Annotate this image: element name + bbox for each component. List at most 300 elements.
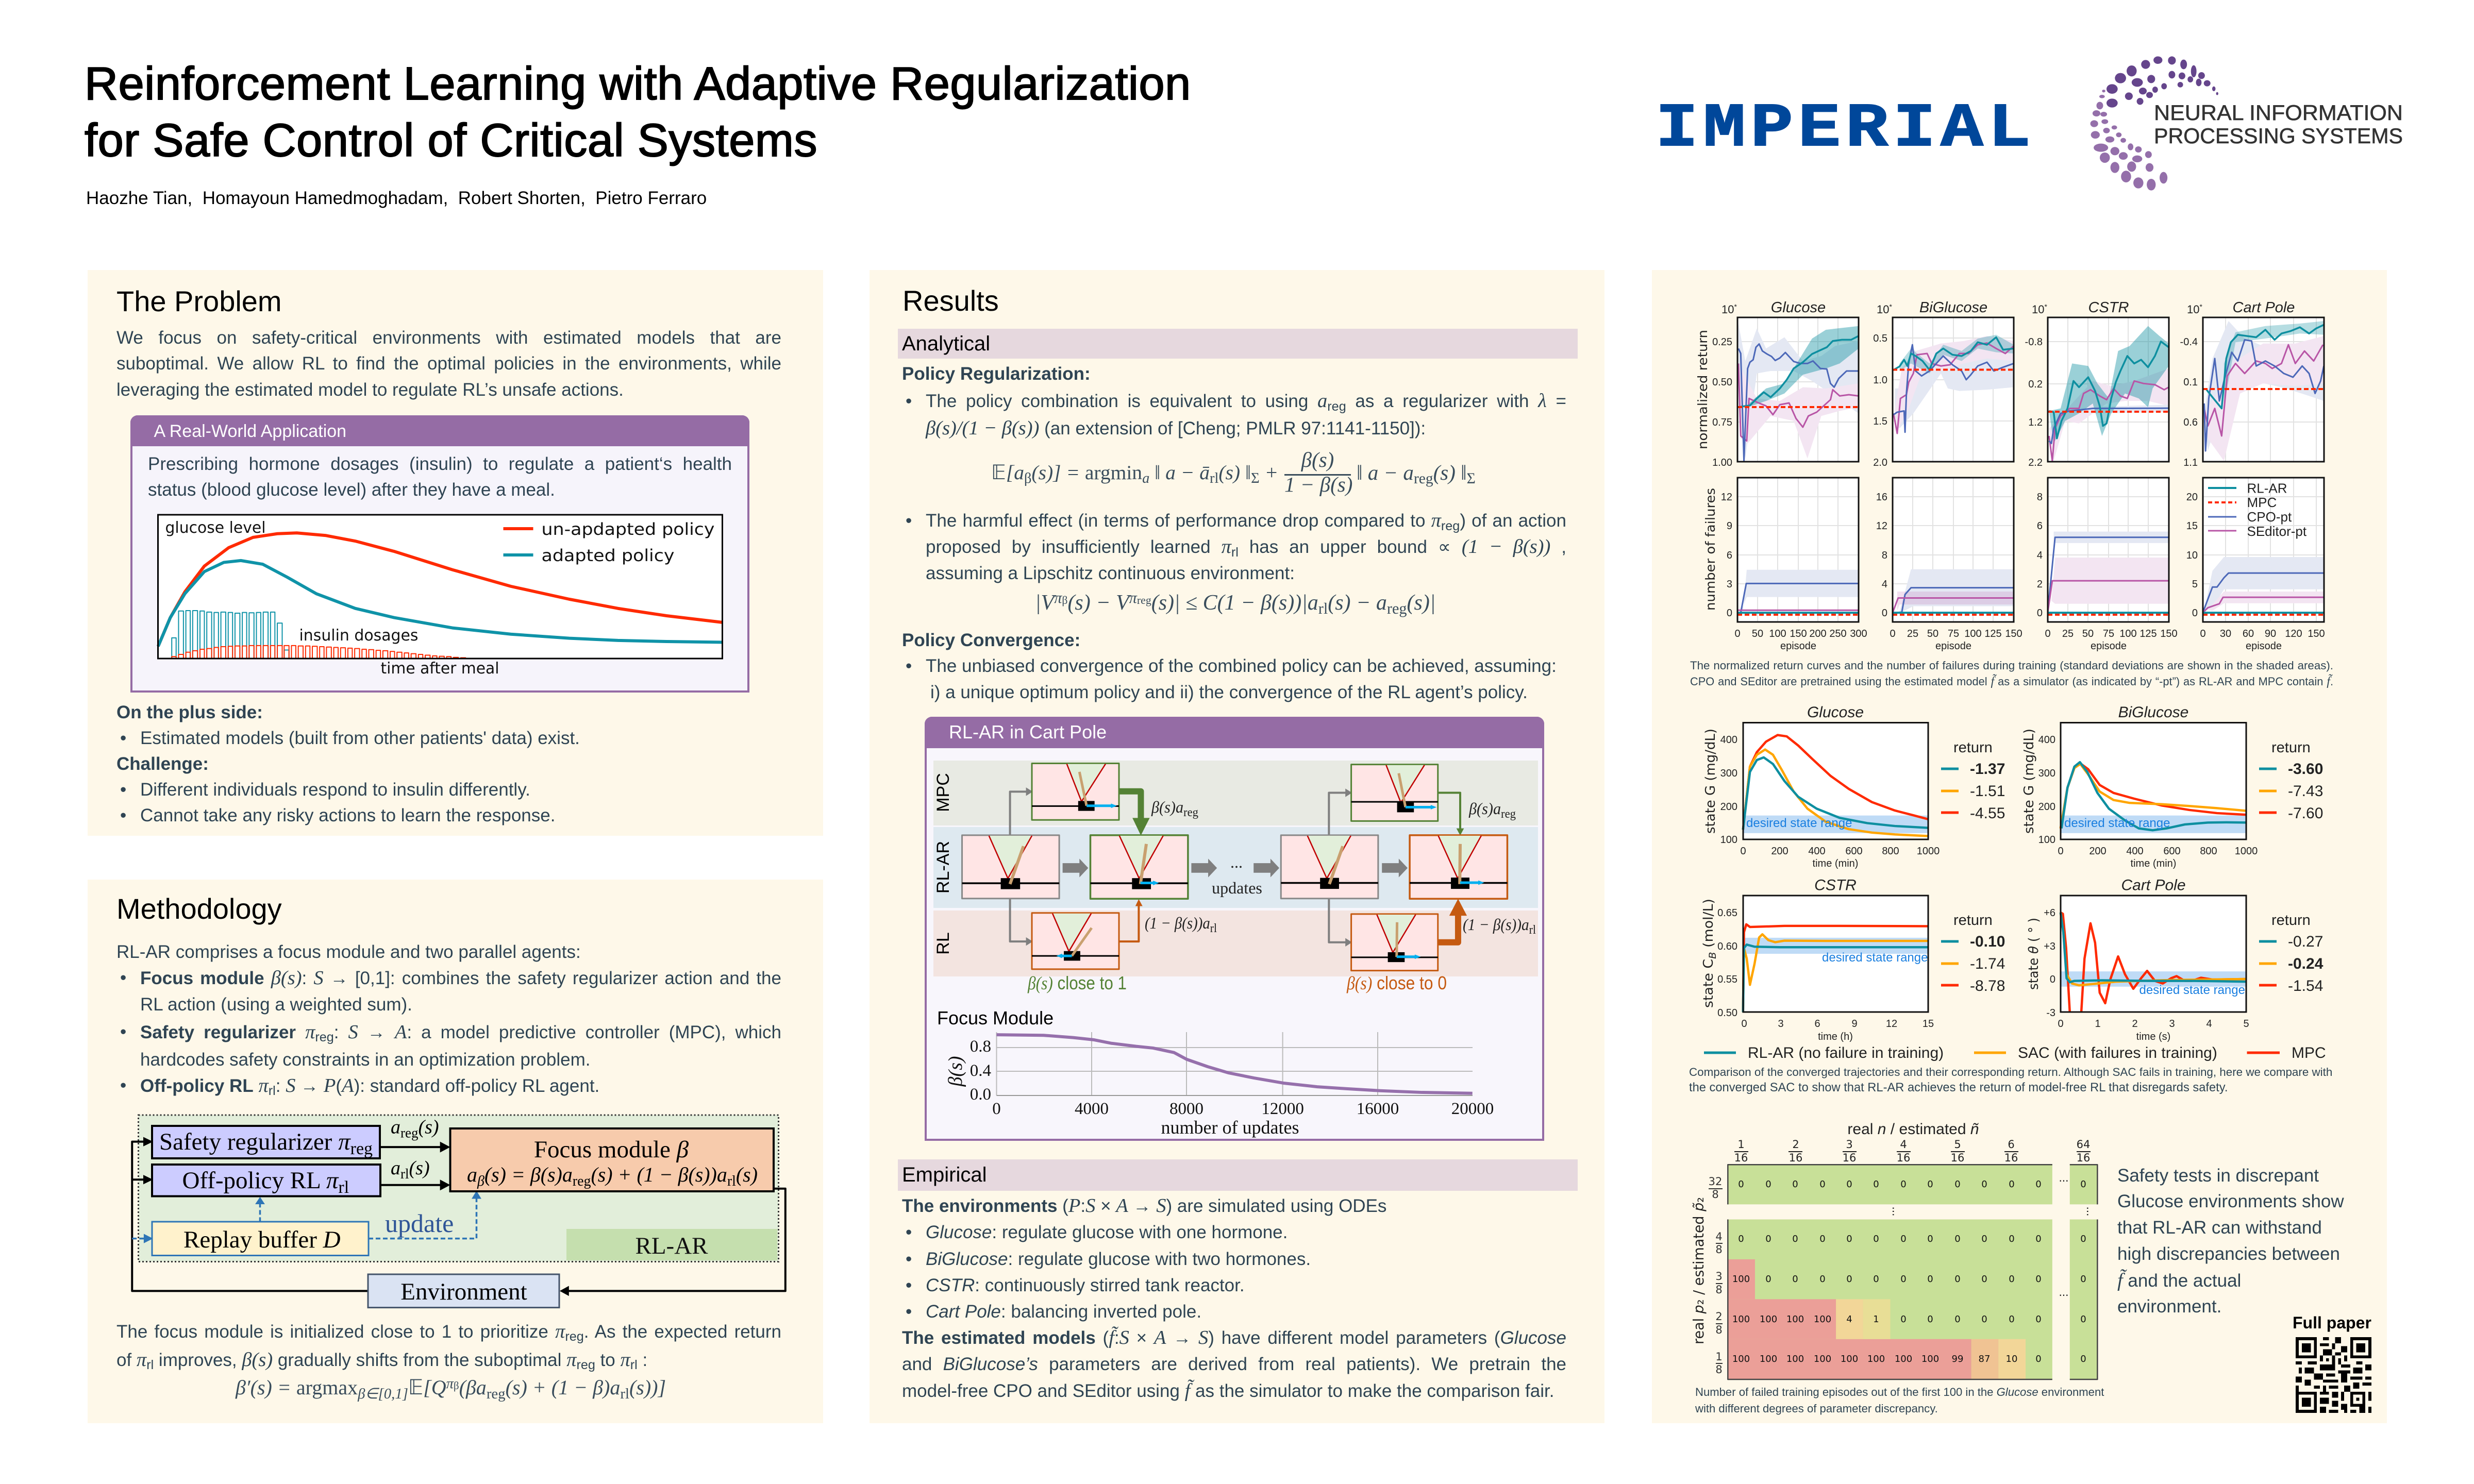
chart: Focus Module: 0 bbox=[992, 1100, 1001, 1118]
callout header bbox=[130, 415, 749, 446]
plot: BiGlucose return: * bbox=[1890, 302, 1893, 311]
chart grid: training curves bbox=[1695, 299, 2325, 652]
text block: safety tests summary bbox=[2117, 1162, 2360, 1320]
plot: CSTR return: 2.2 bbox=[2028, 457, 2043, 468]
plot: Cart Pole trajectory: +3 bbox=[2044, 941, 2055, 952]
focus module box: (s) + (1 − β(s))a bbox=[591, 1163, 727, 1186]
cart frame: MPC late bbox=[1351, 765, 1438, 821]
cart frame: RL-AR combined, early bbox=[1090, 835, 1188, 899]
plot: BiGlucose return: 1.5 bbox=[1873, 416, 1887, 427]
caption: training curves: CPO and SEditor are pretrained using the estimated model f̃ as a simulator (as indicated by “-pt”) as RL-AR and MPC contain f̃. bbox=[1690, 675, 2333, 688]
row headers: 8 bbox=[1715, 1284, 1723, 1296]
text block: policy convergence: Policy Convergence: bbox=[902, 630, 1080, 650]
plot: Cart Pole return: 1.1 bbox=[2183, 457, 2198, 468]
plot: BiGlucose trajectory: BiGlucose bbox=[2118, 704, 2188, 721]
legend: Cart Pole return: return bbox=[2271, 912, 2311, 929]
chart: Focus Module: 4000 bbox=[1075, 1100, 1109, 1118]
text block: focus module explanation: of πrl improves, β(s) gradually shifts from the suboptimal πreg to πrl : bbox=[116, 1349, 647, 1372]
focus module box bbox=[450, 1128, 774, 1191]
callout text: Prescribing hormone dosages (insulin) to regulate a patient‘s health bbox=[148, 454, 732, 474]
column headers: 1 bbox=[1737, 1138, 1745, 1151]
cell values: 0 bbox=[1981, 1314, 1987, 1325]
axis titles: normalized return bbox=[1695, 330, 1710, 449]
plot: Glucose failures: 3 bbox=[1727, 579, 1732, 590]
cell values: 100 bbox=[1814, 1314, 1831, 1325]
safety regularizer box: Safety regularizer π bbox=[159, 1128, 350, 1155]
callout header: RL-AR in Cart Pole bbox=[949, 721, 1107, 743]
arrow labels: β(s)a bbox=[1469, 799, 1503, 818]
cell values: 0 bbox=[1819, 1234, 1826, 1244]
plot: CSTR return: 1.2 bbox=[2028, 417, 2043, 428]
plot: Glucose trajectory: 200 bbox=[1771, 846, 1788, 857]
beta captions: β(s) close to 0 bbox=[1346, 972, 1447, 993]
arrow labels: (1 − β(s))a bbox=[1463, 915, 1535, 934]
text block: policy regularization: β(s)/(1 − β(s)) (an extension of [Cheng; PMLR 97:1141-1150]): bbox=[926, 417, 1426, 439]
caption: trajectories: the converged SAC to show that RL-AR achieves the return of model-free RL that disregards safety. bbox=[1689, 1081, 2228, 1094]
logo: NeurIPS: NEURAL INFORMATION bbox=[2154, 100, 2403, 125]
title: Reinforcement Learning with Adaptive Regularization bbox=[85, 58, 1191, 110]
text block: safety tests summary: high discrepancies between bbox=[2117, 1244, 2340, 1264]
plot: CSTR failures: 150 bbox=[2160, 628, 2178, 639]
cell values: 0 bbox=[1927, 1234, 1933, 1244]
cart frame: MPC early bbox=[1032, 763, 1119, 820]
cell values: 0 bbox=[1792, 1234, 1798, 1244]
text block: harmful effect: proposed by insufficiently learned πrl has an upper bound ∝ (1 − β(s)) , bbox=[926, 536, 1566, 560]
text block: RL-AR components: RL action (using a weighted sum). bbox=[140, 994, 412, 1015]
plot: Glucose trajectory: 0 bbox=[1740, 846, 1746, 857]
environment box bbox=[368, 1274, 559, 1308]
plot: CSTR trajectory bbox=[1701, 877, 2005, 1042]
legend: BiGlucose return bbox=[2259, 739, 2323, 822]
chart: Focus Module bbox=[937, 1007, 1494, 1138]
plot: BiGlucose trajectory: 300 bbox=[2038, 768, 2055, 779]
plot: Glucose return bbox=[1712, 299, 1859, 468]
text block: RL-AR components bbox=[116, 942, 781, 1098]
cell values: 0 bbox=[1900, 1314, 1907, 1325]
plot: Cart Pole trajectory: 0 bbox=[2050, 974, 2055, 985]
icon: QR code bbox=[2295, 1337, 2372, 1413]
authors: Haozhe Tian, Homayoun Hamedmoghadam, Robert Shorten, Pietro Ferraro bbox=[86, 188, 707, 208]
text block: plus side and challenge: Cannot take any risky actions to learn the response. bbox=[140, 805, 555, 825]
cell values: 0 bbox=[2009, 1234, 2015, 1244]
plot: Cart Pole return: 0.1 bbox=[2183, 377, 2198, 388]
plot: BiGlucose trajectory: 400 bbox=[2038, 734, 2055, 746]
cell values: 0 bbox=[1900, 1179, 1907, 1190]
beta captions bbox=[1027, 972, 1447, 993]
cart frame: RL-AR combined, late bbox=[1410, 835, 1507, 899]
plot: BiGlucose return: 0.5 bbox=[1873, 333, 1887, 344]
plot: Cart Pole return bbox=[2180, 299, 2324, 468]
plot: CSTR trajectory: B bbox=[1707, 952, 1718, 959]
cell values: 0 bbox=[2080, 1314, 2086, 1325]
plot: Cart Pole return: * bbox=[2200, 302, 2203, 311]
plot: Cart Pole failures with legend: 15 bbox=[2186, 520, 2198, 532]
cell values: 0 bbox=[1846, 1274, 1852, 1285]
diagram: cart pole comparison bbox=[933, 761, 1538, 993]
plot: BiGlucose trajectory: 0 bbox=[2058, 846, 2064, 857]
plot: CSTR failures: 100 bbox=[2119, 628, 2137, 639]
legend: Glucose return: -1.51 bbox=[1970, 783, 2005, 800]
cell values: 0 bbox=[2009, 1274, 2015, 1285]
plot: Cart Pole return: 10 bbox=[2187, 303, 2200, 316]
panel: The Problem bbox=[88, 270, 823, 836]
text block: plus side and challenge: Different individuals respond to insulin differently. bbox=[140, 780, 530, 800]
text block: environments and models: model-free CPO and SEditor using f̃ as the simulator to make the comparison fair. bbox=[902, 1380, 1554, 1402]
column headers: 4 bbox=[1900, 1138, 1907, 1151]
text block: environments and models: The estimated models (f̃:S × A → S) have different model parameters (Glucose bbox=[902, 1327, 1566, 1348]
equation: focus update: β′(s) = argmaxβ∈[0,1]𝔼[Qπβ(βareg(s) + (1 − β)arl(s))] bbox=[236, 1375, 666, 1402]
text block: problem intro bbox=[116, 328, 781, 400]
chart: Focus Module: 12000 bbox=[1261, 1100, 1304, 1118]
row headers bbox=[1709, 1175, 1723, 1376]
plot: Glucose return: 0.50 bbox=[1712, 377, 1732, 388]
cell values: 100 bbox=[1921, 1354, 1939, 1364]
chart: glucose level vs time after meal: adapted policy bbox=[541, 546, 674, 565]
cell values: ... bbox=[1890, 1206, 1902, 1217]
plot: CSTR trajectory: 15 bbox=[1923, 1018, 1934, 1030]
equation: regularized objective: β(s) bbox=[1301, 448, 1334, 471]
chart: safety test heatmap: real p₂ / estimated p̃₂ bbox=[1690, 1197, 1707, 1344]
plot: Glucose trajectory: desired state range bbox=[1746, 816, 1852, 830]
cart frame: RL-AR later bbox=[1281, 835, 1378, 899]
cell values: 0 bbox=[2035, 1354, 2042, 1364]
legend: training curves: MPC bbox=[2247, 495, 2277, 510]
legend: CSTR return: -1.74 bbox=[1970, 955, 2005, 972]
plot: Glucose trajectory bbox=[1703, 704, 2005, 869]
plot: Glucose trajectory: 300 bbox=[1720, 768, 1737, 779]
callout text: status (blood glucose level) after they have a meal. bbox=[148, 480, 555, 500]
panel: Results bbox=[870, 270, 1604, 1423]
plot: CSTR failures: 0 bbox=[2037, 608, 2043, 619]
plot: BiGlucose trajectory: state G (mg/dL) bbox=[2021, 729, 2037, 834]
legend: CSTR return: return bbox=[1953, 912, 1993, 929]
cart frame: RL early bbox=[1032, 913, 1119, 969]
legend: Glucose return bbox=[1941, 739, 2005, 822]
plot: Glucose trajectory: Glucose bbox=[1807, 704, 1864, 721]
plot: BiGlucose failures: 16 bbox=[1876, 492, 1887, 503]
chart: glucose level vs time after meal: glucose level bbox=[165, 519, 265, 537]
panel: Experiments bbox=[1652, 270, 2387, 1423]
safety regularizer box: reg bbox=[350, 1139, 373, 1158]
cell values: 100 bbox=[1895, 1354, 1912, 1364]
cell values bbox=[1732, 1172, 2097, 1364]
arrow labels bbox=[1145, 798, 1536, 937]
plot: BiGlucose trajectory: 200 bbox=[2089, 846, 2107, 857]
plot: Glucose failures bbox=[1721, 478, 1867, 652]
plot: Cart Pole failures with legend: 90 bbox=[2265, 628, 2276, 639]
plot: Cart Pole return: Cart Pole bbox=[2233, 299, 2295, 316]
focus module box: reg bbox=[573, 1173, 591, 1189]
plot: CSTR failures bbox=[2037, 478, 2178, 652]
cell values: 0 bbox=[1927, 1274, 1933, 1285]
plot: Glucose trajectory: 600 bbox=[1845, 846, 1863, 857]
plot: CSTR failures: 25 bbox=[2062, 628, 2074, 639]
cell values: 0 bbox=[1765, 1234, 1771, 1244]
text block: policy convergence: The unbiased convergence of the combined policy can be achieved, assuming: bbox=[926, 656, 1557, 676]
column headers: 16 bbox=[2004, 1152, 2018, 1164]
plot: Glucose failures: 6 bbox=[1727, 550, 1732, 561]
text block: RL-AR components: Focus module β(s): S → [0,1]: combines the safety regularizer action and the bbox=[140, 967, 781, 989]
text block: environments and models: and BiGlucose’s parameters are derived from real patients). We pretrain the bbox=[902, 1354, 1566, 1374]
cell values: ... bbox=[2059, 1172, 2069, 1184]
cell values: 0 bbox=[1873, 1234, 1879, 1244]
legend: trajectories: RL-AR (no failure in training) bbox=[1748, 1044, 1944, 1061]
plot: Cart Pole trajectory: state θ ( ° ) bbox=[2026, 918, 2042, 990]
plot: Cart Pole return: -0.4 bbox=[2180, 336, 2198, 348]
plot: BiGlucose trajectory: 400 bbox=[2126, 846, 2144, 857]
caption: heatmap: with different degrees of parameter discrepancy. bbox=[1695, 1402, 1938, 1415]
text block: safety tests summary: Glucose environments show bbox=[2117, 1191, 2344, 1211]
plot: Cart Pole trajectory: +6 bbox=[2044, 907, 2055, 919]
plot: Glucose trajectory: state G (mg/dL) bbox=[1703, 729, 1718, 834]
chart: Focus Module: β(s) bbox=[945, 1056, 966, 1087]
plot: Cart Pole trajectory: 3 bbox=[2169, 1018, 2175, 1030]
plot: Glucose trajectory: 1000 bbox=[1917, 846, 1940, 857]
caption: trajectories bbox=[1689, 1064, 2332, 1095]
cell values: 0 bbox=[1954, 1274, 1961, 1285]
cell values: 0 bbox=[1846, 1234, 1852, 1244]
plot: BiGlucose failures: 25 bbox=[1907, 628, 1918, 639]
environment box: Environment bbox=[400, 1278, 527, 1305]
legend: Glucose return: -1.37 bbox=[1970, 761, 2005, 778]
section bar: Analytical: Analytical bbox=[902, 332, 990, 355]
plot: Cart Pole failures with legend: 0 bbox=[2200, 628, 2206, 639]
column headers: 16 bbox=[1734, 1152, 1748, 1164]
plot: Glucose failures: 12 bbox=[1721, 492, 1732, 503]
cell values: 0 bbox=[2009, 1314, 2015, 1325]
text block: environments and models: Cart Pole: balancing inverted pole. bbox=[926, 1302, 1201, 1322]
plot: Glucose trajectory: 200 bbox=[1720, 801, 1737, 813]
plot: CSTR return: CSTR bbox=[2088, 299, 2129, 316]
plot: Glucose trajectory: 400 bbox=[1808, 846, 1826, 857]
plot: BiGlucose return: 10 bbox=[1877, 303, 1890, 316]
chart: Focus Module: 8000 bbox=[1169, 1100, 1203, 1118]
caption: heatmap: Number of failed training episodes out of the first 100 in the Glucose environment bbox=[1695, 1385, 2104, 1398]
column headers: 16 bbox=[1897, 1152, 1910, 1164]
legend: training curves: CPO-pt bbox=[2247, 509, 2292, 525]
cell values: 0 bbox=[1981, 1179, 1987, 1190]
logo: NeurIPS bbox=[2091, 56, 2403, 191]
chart: Focus Module: 0.0 bbox=[970, 1085, 991, 1104]
text block: problem intro: leveraging the estimated model to regulate RL’s unsafe actions. bbox=[116, 380, 624, 400]
plot: CSTR trajectory: 0.65 bbox=[1717, 907, 1737, 919]
section bar: Empirical bbox=[898, 1159, 1578, 1191]
action labels: rl bbox=[400, 1166, 409, 1182]
plot: Cart Pole trajectory: Cart Pole bbox=[2121, 877, 2186, 893]
replay buffer box bbox=[152, 1222, 369, 1255]
cell values: 0 bbox=[1900, 1274, 1907, 1285]
text block: plus side and challenge: On the plus side: bbox=[116, 702, 263, 722]
row headers: 8 bbox=[1715, 1363, 1723, 1376]
row headers: 2 bbox=[1715, 1310, 1723, 1323]
axis titles: number of failures bbox=[1703, 488, 1718, 611]
column headers: 16 bbox=[1951, 1152, 1964, 1164]
cell values: 0 bbox=[1954, 1234, 1961, 1244]
cell values: 0 bbox=[1819, 1179, 1826, 1190]
focus module box: Focus module β bbox=[534, 1136, 689, 1163]
cell values: 0 bbox=[1900, 1234, 1907, 1244]
cell values: 4 bbox=[1846, 1314, 1852, 1325]
text block: policy regularization: The policy combination is equivalent to using areg as a regularizer with λ = bbox=[926, 390, 1566, 414]
text block: environments and models: Glucose: regulate glucose with one hormone. bbox=[926, 1222, 1288, 1242]
plot: Cart Pole trajectory: 2 bbox=[2132, 1018, 2138, 1030]
action labels: (s) bbox=[418, 1116, 439, 1138]
plot: BiGlucose failures: 75 bbox=[1948, 628, 1959, 639]
equation: regularized objective: ‖ a − areg(s) ‖Σ bbox=[1357, 461, 1476, 487]
legend: training curves: RL-AR bbox=[2247, 480, 2287, 496]
plot: Glucose failures: 50 bbox=[1752, 628, 1763, 639]
equation: regularized objective bbox=[991, 448, 1476, 496]
cell values: 0 bbox=[1981, 1234, 1987, 1244]
off-policy RL box bbox=[152, 1165, 380, 1197]
plot: Cart Pole trajectory: -3 bbox=[2046, 1007, 2055, 1019]
legend: trajectories: MPC bbox=[2292, 1044, 2326, 1061]
plot: Cart Pole return: 0.6 bbox=[2183, 417, 2198, 428]
legend: Cart Pole return: -0.27 bbox=[2288, 933, 2323, 950]
column headers: 5 bbox=[1954, 1138, 1961, 1151]
plot: CSTR trajectory: 0.50 bbox=[1717, 1007, 1737, 1019]
column headers: 2 bbox=[1792, 1138, 1799, 1151]
plot: CSTR failures: 6 bbox=[2037, 520, 2043, 532]
caption: training curves bbox=[1690, 657, 2333, 689]
cell values: 0 bbox=[1873, 1179, 1879, 1190]
text block: environments and models bbox=[902, 1195, 1566, 1402]
plot: CSTR return: * bbox=[2045, 302, 2048, 311]
callout text bbox=[148, 454, 732, 500]
plot: CSTR trajectory: CSTR bbox=[1814, 877, 1857, 893]
diagram: cart pole comparison: RL-AR bbox=[933, 841, 953, 893]
cell values: ... bbox=[2084, 1206, 2097, 1217]
cell values: 0 bbox=[2035, 1179, 2042, 1190]
plot: BiGlucose failures: 0 bbox=[1890, 628, 1896, 639]
column headers bbox=[1734, 1138, 2091, 1164]
text block: plus side and challenge: Estimated models (built from other patients' data) exist. bbox=[140, 728, 580, 748]
plot: Glucose failures: 0 bbox=[1734, 628, 1741, 639]
plot: Cart Pole trajectory: 0 bbox=[2058, 1018, 2064, 1030]
plot: CSTR trajectory: 3 bbox=[1778, 1018, 1784, 1030]
cell values: 100 bbox=[1760, 1354, 1777, 1364]
plot: Glucose failures: 9 bbox=[1727, 520, 1732, 532]
legend: Cart Pole return bbox=[2259, 912, 2323, 994]
plot: CSTR trajectory: state C bbox=[1701, 960, 1716, 1008]
cell values: 0 bbox=[1765, 1179, 1771, 1190]
panel: Methodology bbox=[88, 880, 823, 1423]
plot: CSTR trajectory: 6 bbox=[1814, 1018, 1820, 1030]
text block: environments and models: CSTR: continuously stirred tank reactor. bbox=[926, 1275, 1245, 1295]
plot: Cart Pole failures with legend: 5 bbox=[2192, 579, 2198, 590]
plot: Cart Pole failures with legend: 60 bbox=[2243, 628, 2254, 639]
arrows bbox=[132, 1137, 785, 1296]
plot: BiGlucose failures: 100 bbox=[1964, 628, 1982, 639]
cell values: 0 bbox=[1819, 1274, 1826, 1285]
beta captions: β(s) close to 1 bbox=[1027, 972, 1127, 993]
logo: NeurIPS: PROCESSING SYSTEMS bbox=[2154, 124, 2403, 148]
legend: BiGlucose return: -7.43 bbox=[2288, 783, 2323, 800]
plot: Glucose return: 0.75 bbox=[1712, 417, 1732, 428]
cell values: 0 bbox=[1981, 1274, 1987, 1285]
plot: CSTR trajectory: (mol/L) bbox=[1701, 899, 1716, 952]
text block: safety tests summary: f̃ and the actual bbox=[2117, 1270, 2241, 1291]
plot: BiGlucose trajectory: 200 bbox=[2038, 801, 2055, 813]
safety regularizer box bbox=[152, 1126, 380, 1158]
plot: Glucose failures: 200 bbox=[1809, 628, 1827, 639]
text block: policy convergence: i) a unique optimum policy and ii) the convergence of the RL agent’s policy. bbox=[930, 682, 1528, 702]
plot: CSTR trajectory: time (h) bbox=[1818, 1031, 1853, 1042]
cell values: 1 bbox=[1873, 1314, 1879, 1325]
plot: BiGlucose trajectory: 1000 bbox=[2235, 846, 2258, 857]
plot: CSTR failures: 125 bbox=[2139, 628, 2157, 639]
plot: Cart Pole failures with legend: 120 bbox=[2285, 628, 2302, 639]
cell values: 0 bbox=[2035, 1314, 2042, 1325]
cell values: 0 bbox=[2035, 1234, 2042, 1244]
replay buffer box: Replay buffer D bbox=[183, 1226, 341, 1253]
plot: Glucose return: 1.00 bbox=[1712, 457, 1732, 468]
cell values: 0 bbox=[2080, 1179, 2086, 1190]
insulin dosage bars bbox=[158, 533, 722, 658]
arrow labels: (1 − β(s))a bbox=[1145, 914, 1217, 932]
legend: Glucose return: -4.55 bbox=[1970, 805, 2005, 822]
legend: training curves: SEditor-pt bbox=[2247, 524, 2307, 539]
chart: Focus Module: 0.4 bbox=[970, 1061, 991, 1080]
cell values: 100 bbox=[1732, 1274, 1750, 1285]
plot: BiGlucose failures: 12 bbox=[1876, 520, 1887, 532]
chart grid: converged trajectories bbox=[1675, 701, 2350, 1069]
plot: Glucose trajectory: 100 bbox=[1720, 834, 1737, 846]
plot: Cart Pole trajectory: 4 bbox=[2206, 1018, 2212, 1030]
callout header bbox=[925, 717, 1544, 748]
plot: BiGlucose failures: 50 bbox=[1927, 628, 1938, 639]
plot: BiGlucose failures: 4 bbox=[1882, 579, 1887, 590]
callout: RL-AR in Cart Pole bbox=[925, 717, 1544, 1141]
cell values: 10 bbox=[2006, 1354, 2017, 1364]
title: for Safe Control of Critical Systems bbox=[85, 115, 817, 166]
cell values: 0 bbox=[2080, 1354, 2086, 1364]
plot: Glucose trajectory: 400 bbox=[1720, 734, 1737, 746]
plot: BiGlucose trajectory: desired state range bbox=[2064, 816, 2170, 830]
legend: Glucose return: return bbox=[1953, 739, 1993, 756]
column headers: 64 bbox=[2077, 1138, 2090, 1151]
cell values: 100 bbox=[1841, 1354, 1858, 1364]
callout: A Real-World Application bbox=[130, 415, 749, 693]
equation: regularized objective: 𝔼[aβ(s)] = argmina ‖ a − ārl(s) ‖Σ + bbox=[991, 461, 1278, 486]
caption: trajectories: Comparison of the converged trajectories and their corresponding return. Although SAC fails in training, here we compare with bbox=[1689, 1066, 2332, 1078]
chart: Focus Module: number of updates bbox=[1161, 1117, 1299, 1138]
arrow labels: β(s)a bbox=[1151, 798, 1185, 816]
arrow labels: rl bbox=[1210, 922, 1217, 935]
cell values: 0 bbox=[1954, 1314, 1961, 1325]
plot: CSTR trajectory: 9 bbox=[1851, 1018, 1858, 1030]
text block: safety tests summary: Safety tests in discrepant bbox=[2117, 1166, 2319, 1185]
row headers: 3 bbox=[1715, 1270, 1723, 1283]
caption: heatmap bbox=[1695, 1384, 2108, 1417]
cell values: 0 bbox=[1738, 1234, 1744, 1244]
plot: Cart Pole failures with legend: 30 bbox=[2220, 628, 2231, 639]
plot: Cart Pole trajectory bbox=[2026, 877, 2323, 1042]
cell values: 0 bbox=[1792, 1179, 1798, 1190]
diagram: cart pole comparison: RL bbox=[933, 932, 953, 955]
plot: Cart Pole trajectory: time (s) bbox=[2136, 1031, 2170, 1042]
text block: plus side and challenge: Challenge: bbox=[116, 754, 209, 774]
legend: BiGlucose return: -3.60 bbox=[2288, 761, 2323, 778]
plot: Cart Pole trajectory: desired state range bbox=[2139, 983, 2245, 997]
text block: policy regularization bbox=[902, 364, 1566, 439]
plot: BiGlucose failures: 150 bbox=[2005, 628, 2022, 639]
plot: Glucose failures: 250 bbox=[1829, 628, 1847, 639]
chart: glucose level vs time after meal bbox=[157, 514, 723, 678]
text block: RL-AR components: hardcodes safety constraints in an optimization problem. bbox=[140, 1050, 591, 1070]
text block: safety tests summary: environment. bbox=[2117, 1296, 2221, 1317]
plot: CSTR failures: 2 bbox=[2037, 579, 2043, 590]
